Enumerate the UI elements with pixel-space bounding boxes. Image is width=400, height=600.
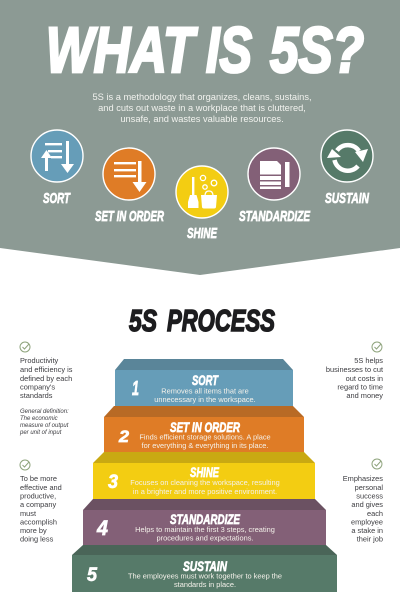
intro text: unsafe, and wastes valuable resources. <box>120 114 284 124</box>
step 1: sort <box>115 359 293 406</box>
step 5: sustain: The employees must work together to keep the <box>128 572 282 580</box>
label: shine: SHINE <box>187 226 218 242</box>
icon: sustain <box>321 130 373 182</box>
step 3: shine: Focuses on cleaning the workspace, resulting <box>130 478 280 487</box>
step 2: set in order <box>104 406 304 452</box>
step 2: set in order: 2 <box>118 427 130 446</box>
note: personal success: and gives <box>351 500 383 509</box>
note: doing less: effective and <box>20 483 62 492</box>
label: sustain: SUSTAIN <box>325 191 369 207</box>
note: personal success <box>343 459 383 544</box>
note: cut costs: businesses to cut <box>326 365 383 374</box>
note: productivity: The economic <box>20 416 58 422</box>
step 1: sort: Removes all items that are <box>161 386 249 396</box>
step 4: standardize <box>83 499 326 545</box>
step 1: sort: unnecessary in the workspace. <box>154 395 256 404</box>
step 3: shine: 3 <box>108 472 118 493</box>
note: personal success: a stake in <box>351 526 383 535</box>
note: productivity: Productivity <box>20 356 59 365</box>
icon: shine <box>176 166 228 218</box>
note: personal success: Emphasizes <box>343 474 383 483</box>
note: doing less: must <box>20 509 36 518</box>
note: productivity: company's <box>20 382 55 392</box>
note: personal success: personal <box>355 483 383 492</box>
title: WHAT <box>46 14 198 86</box>
note: productivity: standards <box>20 391 53 400</box>
heading: 5S process: 5S <box>129 303 157 338</box>
note: doing less: a company <box>20 500 56 509</box>
note: doing less: more by <box>20 526 47 535</box>
intro text: 5S is a methodology that organizes, cleans, sustains, <box>92 92 312 102</box>
step 4: standardize: STANDARDIZE <box>170 511 240 527</box>
step 4: standardize: 4 <box>96 517 108 540</box>
label: standardize: STANDARDIZE <box>239 209 311 225</box>
title: IS <box>206 14 252 86</box>
note: cut costs: and money <box>346 391 383 400</box>
note: productivity: General definition: <box>20 409 69 415</box>
intro text: and cuts out waste in a workplace that is cluttered, <box>98 103 306 113</box>
note: personal success: success <box>356 492 383 500</box>
note: cut costs: regard to time <box>337 382 383 392</box>
note: personal success: their job <box>357 534 383 544</box>
label: set in order: SET IN ORDER <box>95 209 164 225</box>
note: personal success: employee <box>351 518 383 526</box>
icon: sort <box>31 130 83 182</box>
title: 5S? <box>270 14 364 86</box>
step 2: set in order: for everything & everything in its place. <box>142 441 268 450</box>
step 1: sort: 1 <box>132 378 139 400</box>
step 3: shine: in a brighter and more positive environment. <box>133 487 277 496</box>
step 5: sustain: 5 <box>87 565 97 586</box>
note: cut costs: 5S helps <box>354 356 383 365</box>
note: productivity: and efficiency is <box>20 365 73 374</box>
header background panel <box>0 0 400 275</box>
step 2: set in order: Finds efficient storage solutions. A place <box>139 432 271 442</box>
heading: 5S process <box>129 303 275 338</box>
step 2: set in order: SET IN ORDER <box>170 419 241 435</box>
intro text <box>92 92 312 124</box>
step 3: shine <box>93 452 315 499</box>
step 4: standardize: procedures and expectations. <box>157 534 253 542</box>
note: doing less <box>20 460 62 544</box>
title <box>46 14 364 86</box>
note: productivity: measure of output <box>20 423 69 429</box>
step 5: sustain: SUSTAIN <box>183 558 228 574</box>
note: productivity <box>19 342 73 436</box>
note: productivity: defined by each <box>20 374 72 383</box>
step 1: sort: SORT <box>192 372 219 388</box>
note: personal success: each <box>367 509 383 518</box>
note: doing less: doing less <box>20 534 54 544</box>
note: doing less: accomplish <box>20 518 57 526</box>
note: cut costs: out costs in <box>346 374 383 383</box>
step 3: shine: SHINE <box>190 464 219 480</box>
step 4: standardize: Helps to maintain the first 3 steps, creating <box>135 525 275 534</box>
note: doing less: productive, <box>20 492 56 500</box>
heading: 5S process: PROCESS <box>167 303 275 338</box>
step 5: sustain: standards in place. <box>174 580 236 589</box>
note: doing less: To be more <box>20 474 57 483</box>
note: productivity: per unit of input <box>19 430 62 436</box>
icon: standardize <box>248 148 300 200</box>
step 5: sustain <box>72 545 337 592</box>
label: sort: SORT <box>43 191 71 207</box>
icon: set in order <box>103 148 155 200</box>
note: cut costs <box>326 342 383 400</box>
